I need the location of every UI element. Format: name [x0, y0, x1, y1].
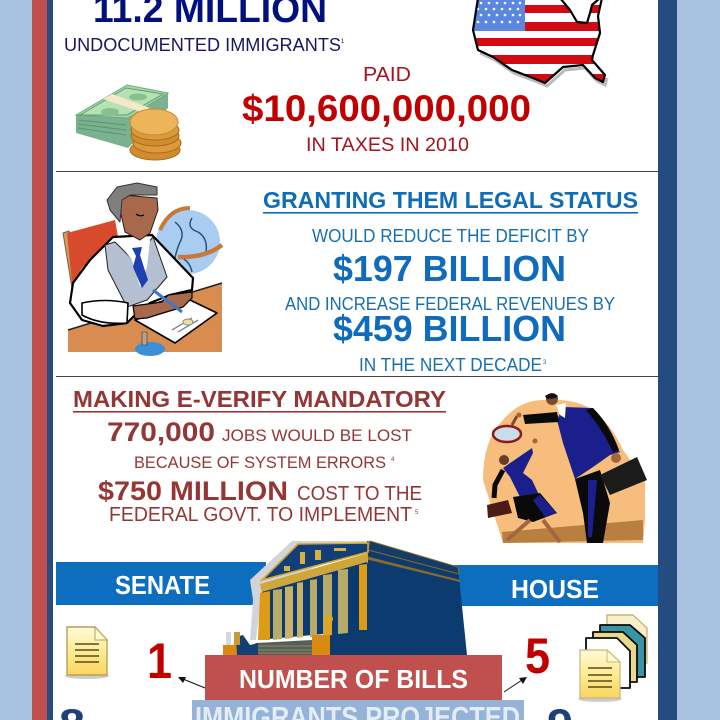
- heading: granting legal status: GRANTING THEM LEGAL STATUS: [263, 187, 638, 213]
- text: $750 million cost: [98, 476, 422, 506]
- text: increase federal revenues: AND INCREASE FEDERAL REVENUES BY: [285, 294, 615, 314]
- icon: tall boss inspecting small worker: [483, 393, 647, 543]
- text: undocumented immigrants: 1: [341, 39, 345, 45]
- icon: capitol building: [223, 541, 467, 655]
- box: number of bills: [205, 655, 502, 700]
- text: 770,000 jobs lost: JOBS WOULD BE LOST: [222, 426, 412, 445]
- band: senate: [56, 562, 266, 605]
- figure: $459 billion: $459 BILLION: [333, 308, 566, 349]
- text: $750 million cost: COST TO THE: [297, 483, 422, 505]
- text: in the next decade: 3: [543, 360, 547, 366]
- heading: making e-verify mandatory: MAKING E-VERIFY MANDATORY: [73, 386, 446, 412]
- icon: single bill document: [65, 627, 109, 679]
- icon: money and coins: [76, 85, 181, 160]
- text: 770,000 jobs lost: 770,000: [107, 417, 215, 447]
- label: house: HOUSE: [511, 574, 599, 604]
- number: house bills: 5: [525, 628, 550, 684]
- text: 770,000 jobs lost: [107, 417, 412, 447]
- label: senate: SENATE: [115, 570, 210, 600]
- label: number of bills: NUMBER OF BILLS: [239, 664, 468, 694]
- icon: businessman signing document: [63, 183, 222, 356]
- text: in taxes in 2010: IN TAXES IN 2010: [306, 135, 469, 156]
- number: senate bills: 1: [147, 633, 172, 689]
- panel: legal status: [63, 183, 638, 375]
- panel: e-verify: [73, 386, 647, 543]
- figure: taxes paid amount: $10,600,000,000: [242, 88, 531, 129]
- text: in the next decade: IN THE NEXT DECADE: [359, 355, 542, 375]
- text: undocumented immigrants: UNDOCUMENTED IMMIGRANTS: [64, 34, 341, 55]
- arrow: to senate count: [178, 677, 205, 688]
- text: because of system errors: BECAUSE OF SYSTEM ERRORS: [134, 453, 386, 472]
- band: house: [450, 565, 658, 606]
- text: paid: PAID: [363, 64, 411, 86]
- text: because of system errors: 4: [391, 457, 395, 463]
- icon: US flag map: [470, 0, 610, 88]
- text: federal govt to implement: 5: [415, 510, 419, 516]
- text: $750 million cost: $750 MILLION: [98, 476, 288, 506]
- text: would reduce the deficit: WOULD REDUCE THE DEFICIT BY: [312, 226, 589, 246]
- text: federal govt to implement: FEDERAL GOVT. TO IMPLEMENT: [109, 504, 412, 526]
- icon: stack of bill documents: [578, 615, 647, 702]
- box: immigrants projected: [192, 700, 524, 720]
- panel: taxes paid: [64, 0, 610, 160]
- figure: $197 billion: $197 BILLION: [333, 248, 566, 289]
- arrow: to house count: [504, 677, 527, 692]
